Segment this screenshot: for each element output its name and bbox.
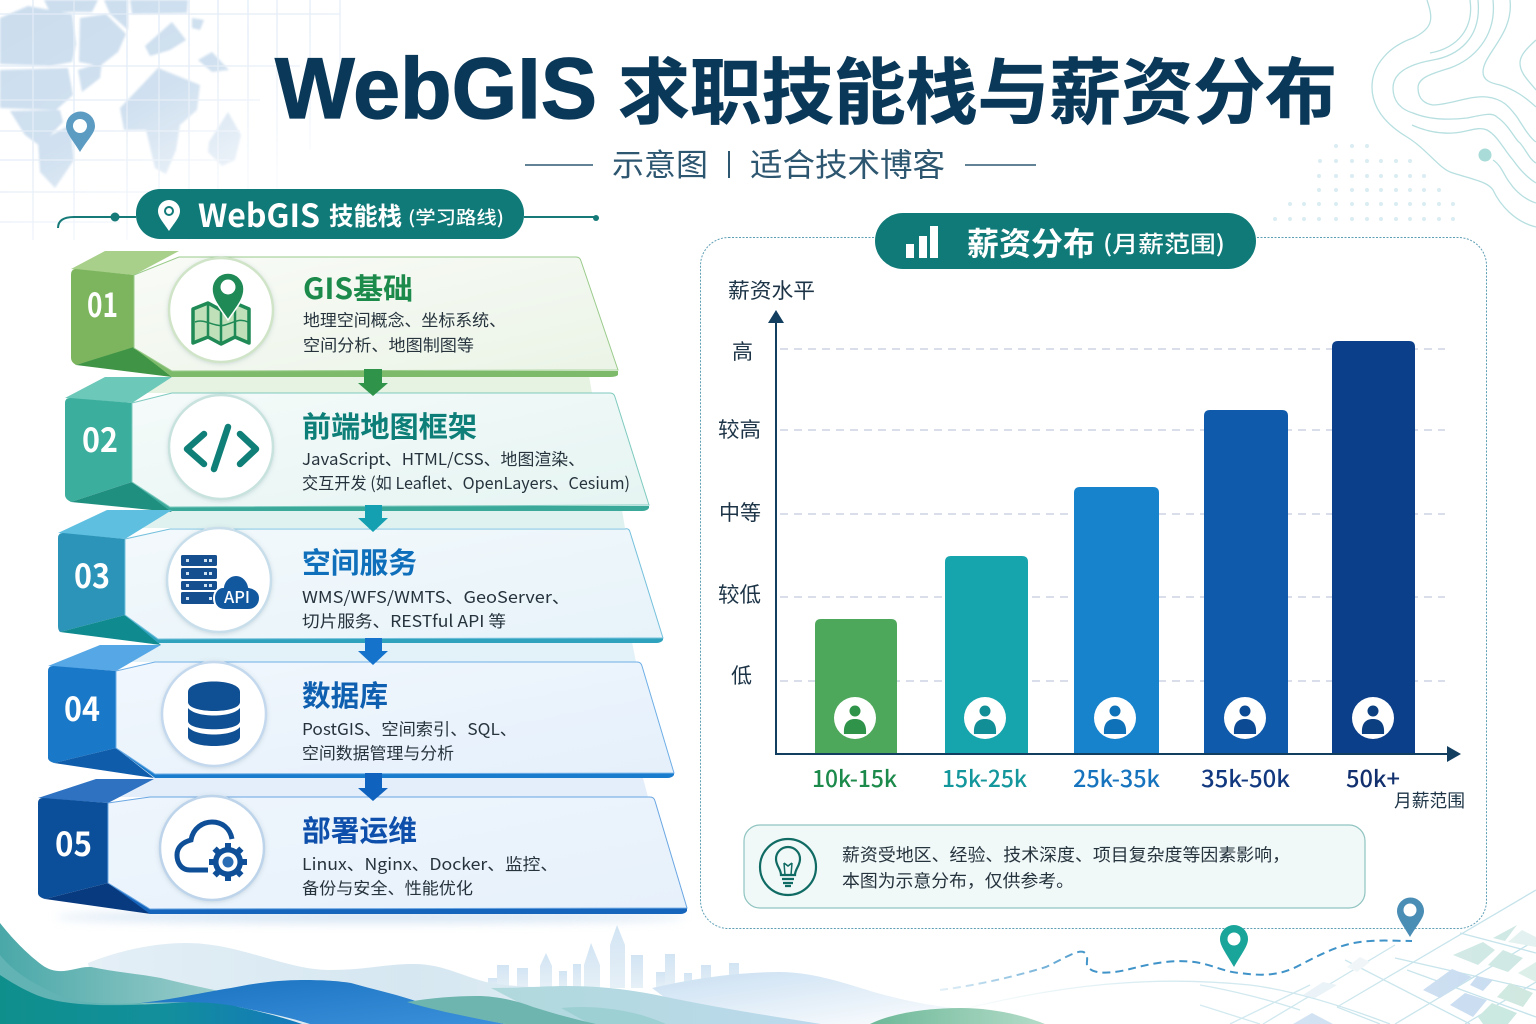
- icon: cloud with gear: [160, 796, 264, 900]
- arrow: step 3 to 4: [358, 638, 388, 665]
- step 3 text: WMS/WFS/WMTS、GeoServer、: [302, 584, 570, 608]
- step 1 text: 空间分析、地图制图等: [303, 332, 474, 356]
- bar: 15k-25k: [945, 556, 1028, 754]
- step 5 number block: 05: [55, 818, 92, 866]
- background: skyline: [488, 925, 739, 989]
- step 4 text: 空间数据管理与分析: [302, 740, 454, 764]
- heading: skill stack pill: WebGIS: [198, 191, 320, 237]
- bar: 10k-15k: [815, 619, 897, 754]
- title: WebGIS: [275, 41, 597, 137]
- step 2 number block: [65, 377, 172, 512]
- chart: y axis labels: [718, 275, 815, 690]
- heading: skill stack pill: (学习路线): [408, 204, 504, 230]
- step 2 number block: 02: [82, 414, 118, 462]
- panel: salary chart card: [700, 213, 1486, 928]
- step 1 text: [303, 266, 506, 356]
- step 2 text: [302, 404, 630, 494]
- heading: salary pill: [875, 213, 1256, 269]
- panel: step 5 deployment: [38, 779, 687, 922]
- panel: step 1 GIS basics: [71, 251, 618, 393]
- subtitle: [525, 140, 1036, 186]
- icon: contour dot: [1478, 148, 1492, 162]
- chart: bars: [815, 341, 1415, 754]
- arrow: step 4 to 5: [358, 773, 388, 801]
- chart: x axis labels: 25k-35k: [1073, 760, 1160, 794]
- background: city map: [960, 890, 1536, 1024]
- chart: y axis labels: 薪资水平: [728, 275, 815, 305]
- heading: skill stack pill: 技能栈: [329, 197, 402, 233]
- chart: y axis labels: 高: [732, 336, 753, 366]
- chart: x axis labels: 10k-15k: [812, 760, 897, 794]
- step 2 text: JavaScript、HTML/CSS、地图渲染、: [302, 446, 585, 470]
- step 5 text: 备份与安全、性能优化: [302, 875, 473, 899]
- background: dot grid: [1273, 144, 1455, 221]
- step 3 text: [302, 540, 570, 632]
- step 5 text: Linux、Nginx、Docker、监控、: [302, 851, 558, 875]
- route: dashed path: [940, 941, 1412, 990]
- icon: teal map pin: [1220, 925, 1248, 967]
- icon: code brackets: [169, 395, 273, 499]
- arrow: step 1 to 2: [358, 369, 388, 396]
- step 3 number block: [58, 510, 172, 645]
- chart: y axis labels: 较低: [718, 579, 761, 609]
- step 4 text: 数据库: [302, 673, 388, 715]
- panel: step 4 database: [48, 645, 674, 797]
- step 2 text: 交互开发 (如 Leaflet、OpenLayers、Cesium): [302, 470, 630, 494]
- icon: blue map pin: [1397, 898, 1424, 937]
- icon: server and API cloud: [167, 528, 271, 632]
- chart: x axis labels: 35k-50k: [1201, 760, 1290, 794]
- step 3 text: 切片服务、RESTful API 等: [302, 608, 506, 632]
- step 1 text: GIS基础: [303, 266, 413, 308]
- chart: x axis labels: 50k+: [1346, 760, 1400, 794]
- icon: database: [162, 662, 266, 766]
- arrow: step 2 to 3: [358, 505, 388, 532]
- title: [275, 34, 1337, 139]
- bar: 35k-50k: [1204, 410, 1288, 754]
- callout: salary note: [744, 825, 1365, 908]
- background: bottom waves: [0, 923, 1045, 1024]
- callout: salary note: 本图为示意分布，仅供参考。: [842, 868, 1074, 893]
- chart: y axis labels: 较高: [718, 414, 761, 444]
- title: 求职技能栈与薪资分布: [618, 34, 1337, 139]
- step 1 text: 地理空间概念、坐标系统、: [303, 307, 506, 331]
- step 4 text: [302, 673, 517, 764]
- step 3 text: 空间服务: [302, 540, 417, 582]
- chart: x axis labels: [812, 760, 1465, 813]
- step 1 number block: [71, 251, 179, 377]
- chart: axes: [768, 310, 1461, 762]
- bar: 25k-35k: [1074, 487, 1159, 754]
- heading: salary pill: 薪资分布: [967, 219, 1095, 265]
- bar: 50k+: [1332, 341, 1415, 754]
- step 2 text: 前端地图框架: [302, 404, 477, 446]
- background: world map: [0, 0, 340, 240]
- chart: y axis labels: 中等: [719, 497, 761, 527]
- icon: server and API cloud: API: [224, 584, 250, 608]
- background: contour lines: [1372, 0, 1536, 227]
- subtitle: 适合技术博客: [750, 140, 945, 186]
- panel: step 2 front-end frameworks: [65, 377, 649, 528]
- icon: map pin top left: [66, 112, 95, 152]
- chart: y axis labels: 低: [731, 660, 752, 690]
- step 5 text: 部署运维: [302, 808, 417, 850]
- heading: skill stack pill: [58, 189, 599, 239]
- panel: step 3 spatial services: [58, 510, 663, 662]
- callout: salary note: 薪资受地区、经验、技术深度、项目复杂度等因素影响，: [842, 842, 1290, 867]
- step 4 number block: [48, 645, 161, 778]
- chart: x axis labels: 月薪范围: [1394, 787, 1465, 813]
- step 5 number block: [38, 779, 154, 914]
- heading: salary pill: (月薪范围): [1103, 225, 1225, 259]
- icon: map and pin: [169, 258, 273, 362]
- step 4 number block: 04: [64, 683, 100, 731]
- chart: x axis labels: 15k-25k: [942, 760, 1027, 794]
- step 3 number block: 03: [74, 550, 110, 598]
- step 4 text: PostGIS、空间索引、SQL、: [302, 716, 517, 740]
- step 5 text: [302, 808, 558, 899]
- icon: light bulb: [760, 839, 816, 895]
- subtitle: 示意图: [612, 140, 708, 185]
- step 1 number block: 01: [87, 279, 118, 327]
